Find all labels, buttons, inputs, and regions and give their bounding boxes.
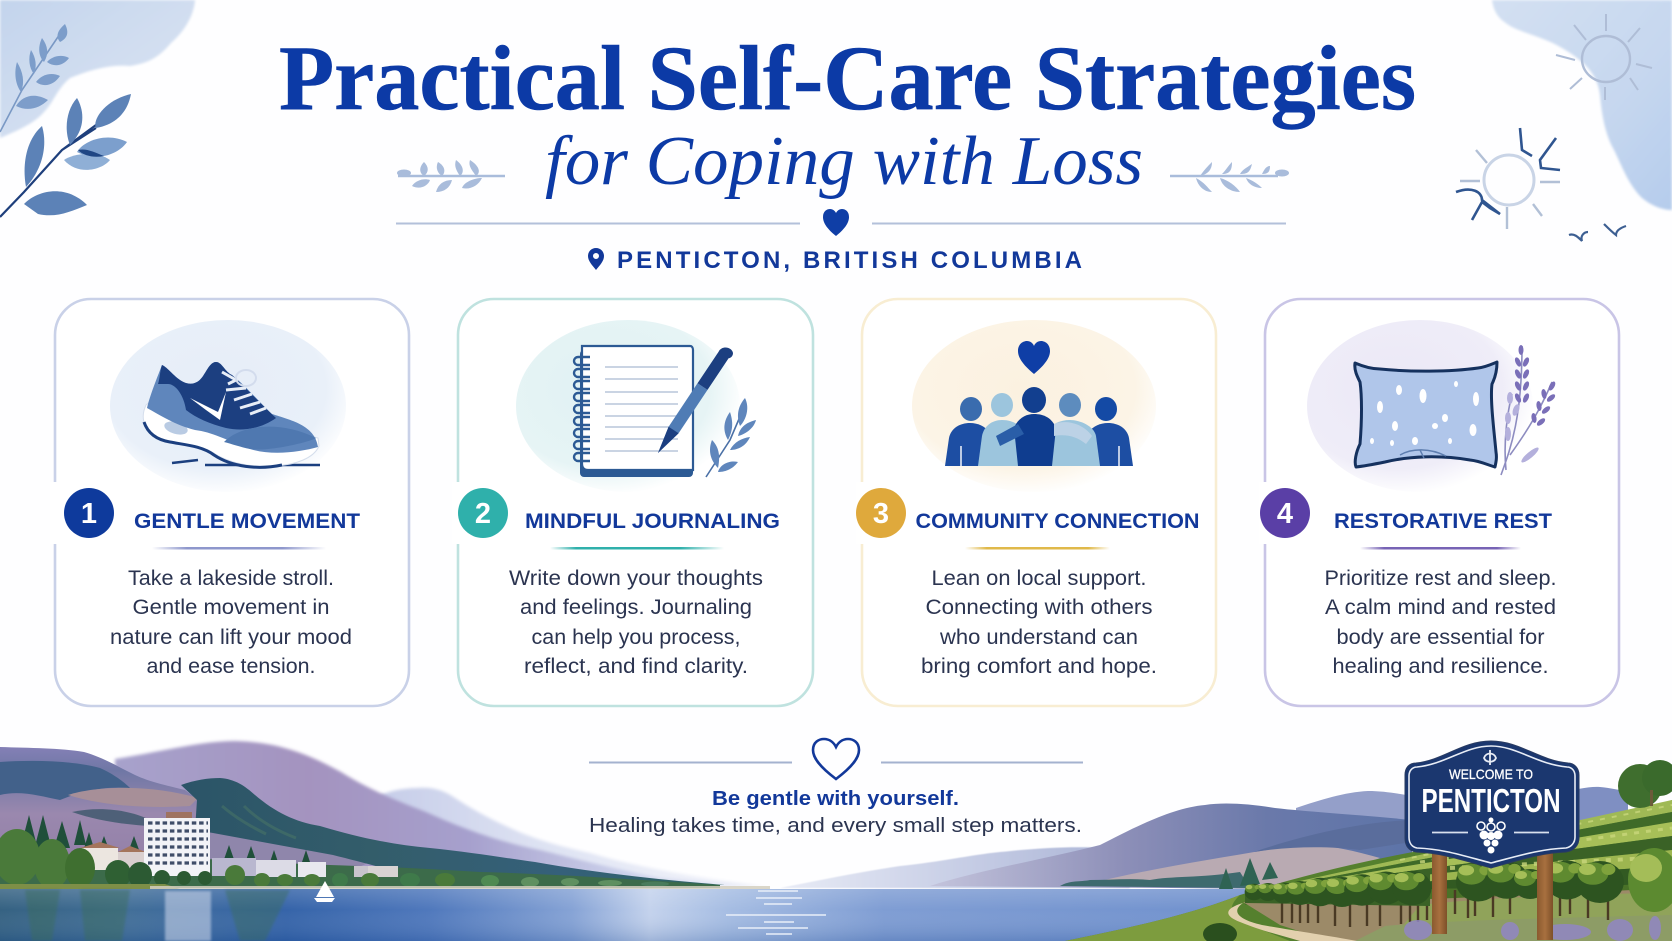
lavender flowers (1404, 916, 1661, 941)
hotel building (144, 812, 210, 876)
number badge 1: 1 (81, 498, 97, 530)
large vine at right edge (1628, 848, 1672, 912)
dark bush (1203, 923, 1237, 941)
divider with heart (396, 209, 1286, 236)
message text: Healing takes time, and every small step matters. (589, 814, 1082, 837)
body text: can help you process, (532, 625, 740, 649)
sign ornament (1484, 750, 1496, 765)
distant tree line (1060, 872, 1250, 888)
body text (110, 566, 352, 678)
sign lines (1432, 832, 1549, 834)
watercolor blob (1492, 0, 1672, 210)
body text: nature can lift your mood (110, 625, 352, 649)
blob (912, 320, 1156, 492)
body text: Prioritize rest and sleep. (1324, 566, 1556, 590)
watercolor blob (0, 0, 195, 138)
tan foothill (1080, 845, 1380, 888)
panel: mindful journaling (452, 299, 813, 706)
underline (550, 547, 724, 550)
purple foot below ridge (200, 826, 370, 880)
back mountain (1296, 791, 1412, 830)
dark forest band (0, 761, 130, 800)
underline (152, 547, 326, 550)
welcome to Penticton sign: PENTICTON (1422, 782, 1560, 819)
number badge 1 (64, 488, 114, 538)
body text (509, 566, 763, 678)
landscape: vineyard hillside (1065, 760, 1672, 941)
body text: Write down your thoughts (509, 566, 763, 590)
lake (0, 881, 1300, 941)
blob (1307, 320, 1533, 492)
body text (1324, 566, 1556, 678)
underline (1360, 547, 1521, 550)
number badge 2: 2 (475, 498, 491, 530)
icon: heart (1018, 341, 1050, 374)
message heading: Be gentle with yourself. (712, 787, 959, 810)
icon: notebook (574, 346, 733, 477)
front vine canopy band (1245, 872, 1430, 906)
location line: PENTICTON, BRITISH COLUMBIA (617, 247, 1082, 274)
right sprig ornament (1170, 162, 1289, 192)
vine row bands (1245, 800, 1672, 906)
main mountain (930, 804, 1412, 890)
number badge 4: 4 (1277, 498, 1293, 530)
sign board (1405, 741, 1579, 868)
lower foreground (1355, 915, 1672, 941)
ground under vines (1243, 888, 1672, 941)
icon: heart outline (813, 739, 859, 779)
body text: Take a lakeside stroll. (128, 566, 334, 590)
back mountain (115, 741, 760, 886)
town and tree line (0, 849, 720, 888)
number badge 4 (1260, 488, 1310, 538)
icon: heart (823, 209, 849, 236)
near purple hillside (0, 747, 225, 880)
shoreline (0, 884, 180, 889)
sign posts (1432, 850, 1553, 940)
lower sun (1456, 128, 1560, 229)
body text: and feelings. Journaling (520, 595, 752, 619)
upper sun (1556, 14, 1652, 100)
icon: lavender (1501, 345, 1557, 475)
dark forested ridge (181, 778, 725, 885)
dirt path (1228, 903, 1357, 941)
conifers (21, 815, 312, 868)
forest patch (72, 809, 150, 826)
blob (110, 320, 346, 492)
body text: reflect, and find clarity. (524, 654, 748, 678)
body text: and ease tension. (146, 654, 316, 678)
body text: Lean on local support. (932, 566, 1146, 590)
far pale mountain (370, 788, 770, 887)
round trees (0, 829, 669, 889)
icon: group of people (945, 387, 1133, 466)
number badge 3 (856, 488, 906, 538)
heading: MINDFUL JOURNALING (525, 510, 780, 533)
panel: community connection (856, 299, 1216, 706)
landscape: left shore with mountains and town (0, 741, 770, 889)
birds (1569, 224, 1626, 241)
welcome to Penticton sign (1405, 741, 1579, 940)
icon: map pin (588, 248, 604, 270)
houses (80, 842, 398, 877)
body text (921, 566, 1157, 678)
heading: RESTORATIVE REST (1334, 510, 1552, 533)
title: Practical Self-Care Strategies (279, 27, 1416, 129)
body text: who understand can (939, 625, 1138, 649)
blob (516, 320, 740, 492)
body text: A calm mind and rested (1325, 595, 1556, 619)
underline (965, 547, 1110, 550)
vine canopies (1245, 860, 1624, 907)
body text: body are essential for (1336, 625, 1544, 649)
left sprig ornament (397, 160, 505, 192)
lower leaf sprig (0, 94, 131, 217)
upper leaf sprig (0, 24, 69, 132)
far ridge (780, 847, 1130, 888)
body text: Gentle movement in (132, 595, 330, 619)
hill (1065, 800, 1672, 941)
decoration: top-right watercolor blob, suns and birds (1456, 0, 1672, 241)
tan slope (68, 788, 198, 807)
icon: grapes (1477, 818, 1505, 854)
number badge 3: 3 (873, 498, 889, 530)
vine trunks (1282, 890, 1608, 927)
tree at right (1618, 760, 1672, 808)
ridge highlights (222, 806, 296, 838)
number badge 2 (458, 488, 508, 538)
landscape: right mountains (780, 787, 1628, 892)
heading: GENTLE MOVEMENT (134, 510, 360, 533)
body text: healing and resilience. (1332, 654, 1548, 678)
sailboat (314, 881, 335, 902)
panel: restorative rest (1259, 299, 1619, 706)
panel: gentle movement (50, 299, 409, 706)
closing message (589, 739, 1083, 837)
icon: running shoe (143, 362, 320, 467)
subtitle: for Coping with Loss (545, 123, 1143, 200)
divider lines (589, 762, 1083, 764)
row texture (1400, 805, 1672, 868)
icon: pillow (1355, 362, 1497, 467)
body text: Connecting with others (926, 595, 1152, 619)
sign text: WELCOME TO (1449, 766, 1533, 782)
reflections (726, 890, 826, 935)
heading: COMMUNITY CONNECTION (916, 510, 1200, 533)
sign inner border (1409, 746, 1575, 863)
icon: leaf sprig (706, 398, 756, 477)
foreground grass (1065, 895, 1290, 941)
body text: bring comfort and hope. (921, 654, 1157, 678)
decoration: top-left watercolor blob and leaves (0, 0, 195, 217)
dark slope (1254, 820, 1412, 852)
